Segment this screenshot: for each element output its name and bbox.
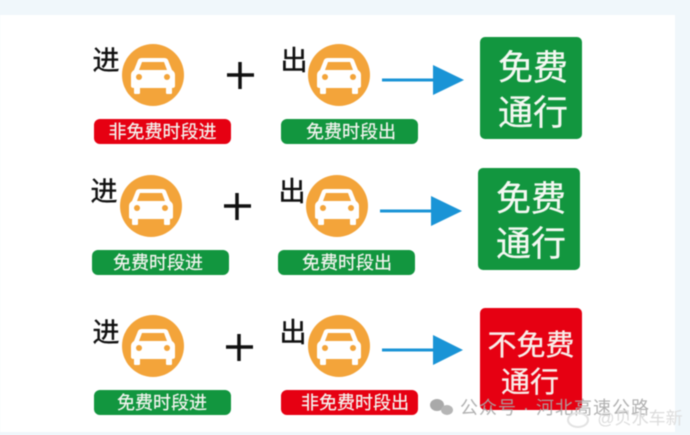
- result: free pass: [480, 37, 582, 139]
- arrow: [382, 65, 464, 95]
- result: free pass: 通行: [496, 225, 566, 264]
- label: enter: 进: [90, 177, 118, 207]
- result: not free: [480, 308, 582, 410]
- panel: row 3: [92, 308, 582, 415]
- watermark: Weibo handle: @贝水车新: [597, 409, 683, 428]
- label: exit: 出: [280, 318, 306, 348]
- icon: car enter: [122, 44, 184, 106]
- panel: row 2: [90, 168, 580, 275]
- icon: car enter: [120, 175, 182, 237]
- arrow: [382, 335, 463, 365]
- icon: car exit: [308, 44, 370, 106]
- pill: non-free period exit: [281, 390, 418, 415]
- result: not free: 不免费: [487, 329, 575, 362]
- pill: free period exit: 免费时段出: [302, 253, 392, 273]
- result: not free: 通行: [501, 366, 559, 399]
- pill: free period enter: [92, 250, 229, 275]
- result: free pass: 免费: [498, 49, 568, 88]
- watermark: WeChat account: 公众号 · 河北高速公路: [460, 398, 650, 418]
- plus sign: [226, 334, 253, 361]
- pill: free period enter: 免费时段进: [117, 393, 207, 413]
- label: exit: 出: [278, 177, 306, 207]
- panel: row 1: [92, 37, 582, 144]
- result: free pass: 免费: [496, 180, 566, 219]
- pill: non-free period exit: 非免费时段出: [301, 393, 409, 413]
- pill: free period exit: [278, 250, 415, 275]
- icon: car exit: [308, 315, 370, 377]
- arrow: [380, 196, 462, 226]
- pill: non-free period enter: [94, 119, 231, 144]
- plus sign: [227, 62, 254, 89]
- pill: free period exit: [281, 119, 418, 144]
- result: free pass: 通行: [498, 94, 568, 133]
- pill: free period enter: [94, 390, 231, 415]
- label: enter: 进: [92, 318, 120, 348]
- icon: car exit: [306, 175, 368, 237]
- result: free pass: [478, 168, 580, 270]
- plus sign: [224, 193, 251, 220]
- label: exit: 出: [280, 46, 308, 76]
- icon: car enter: [122, 315, 184, 377]
- pill: free period enter: 免费时段进: [113, 253, 203, 273]
- pill: free period exit: 免费时段出: [306, 122, 396, 142]
- label: enter: 进: [92, 46, 120, 76]
- pill: non-free period enter: 非免费时段进: [108, 122, 216, 142]
